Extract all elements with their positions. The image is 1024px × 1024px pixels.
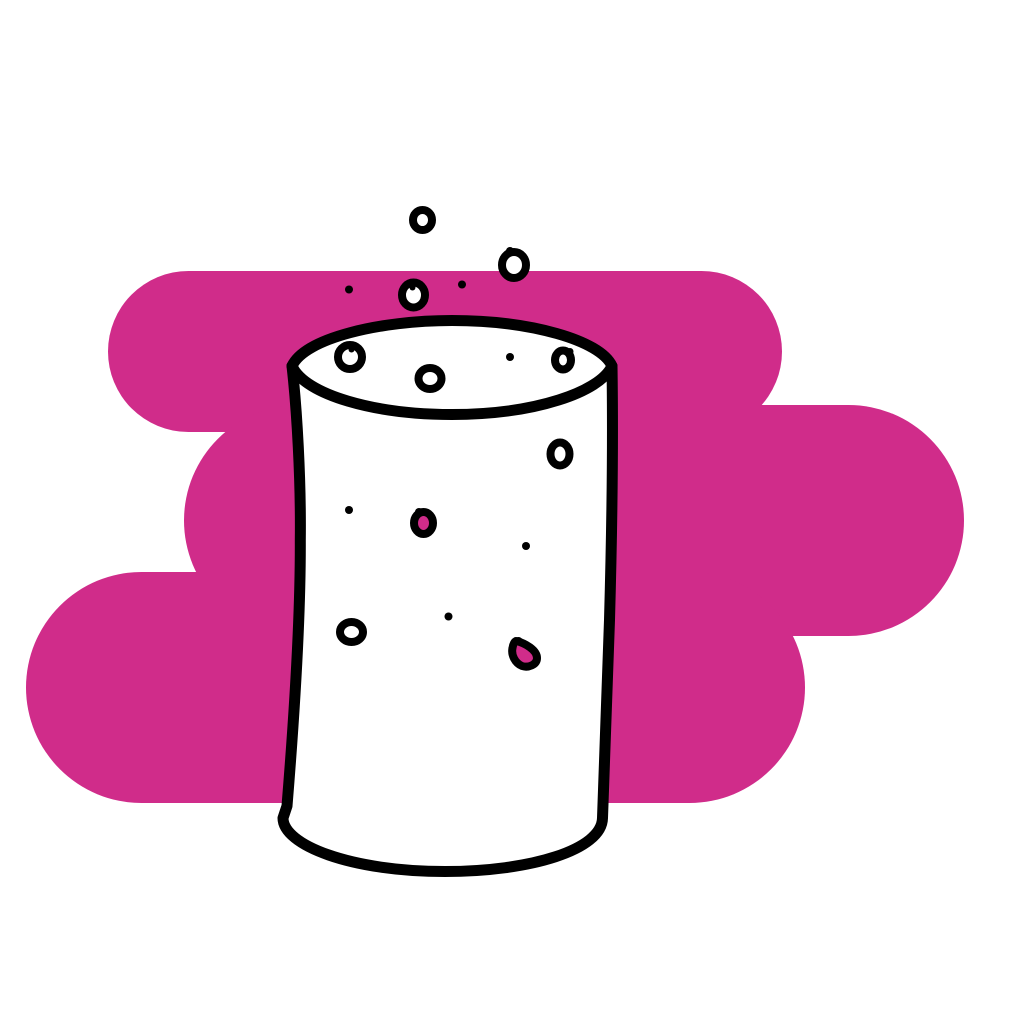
magenta-filled bubbles <box>414 512 537 667</box>
bubbles <box>338 210 571 642</box>
magenta cloud background <box>26 271 964 803</box>
small dots <box>345 280 530 620</box>
cylinder rim <box>292 366 612 414</box>
cylinder glass <box>283 320 612 872</box>
bubble nubs <box>348 247 574 645</box>
